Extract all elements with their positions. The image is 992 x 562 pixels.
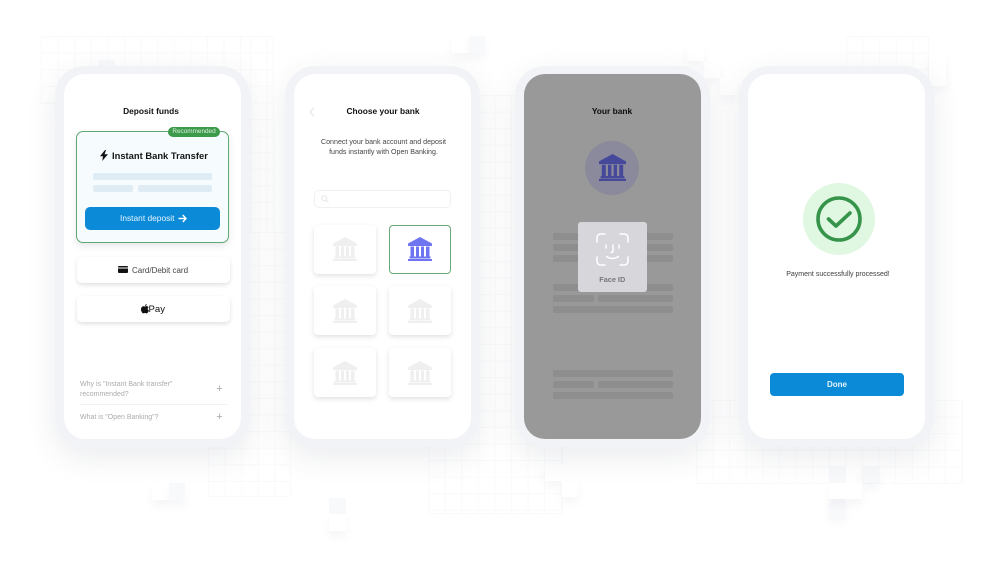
intro text: funds instantly with Open Banking. [329,148,438,156]
floating squares: top right of phone 3 [687,44,737,95]
card heading: Instant Bank Transfer [112,150,208,161]
floating squares: bottom left [165,500,173,502]
option label: Card/Debit card [132,266,188,275]
background grid: centre [428,95,562,514]
icon: bank [408,299,432,323]
panel: phone 2 choose your bank [285,66,480,447]
badge: recommended: Recommended [172,128,216,135]
card: instant bank transfer [76,131,229,243]
faq: why instant bank transfer: recommended? [80,391,129,398]
search field [314,190,451,208]
button label: Instant deposit [120,213,174,223]
faq: why instant bank transfer [80,380,173,398]
apple pay label: Pay [148,304,165,315]
option: apple pay [76,296,230,322]
bank tile 5 [314,348,376,397]
icon: bank [408,361,432,385]
icon: bank in circle [585,141,639,195]
option: card or debit card [76,257,230,283]
faq divider [80,404,228,405]
heading: your bank: Your bank [592,106,632,116]
faq plus icon: + [216,411,223,423]
panel: phone 1 deposit funds [55,66,250,447]
icon: back chevron [310,108,314,116]
icon: bank [333,237,357,261]
floating squares: bottom right [829,499,846,510]
floating squares: bottom centre left [329,498,346,531]
intro text [321,138,446,156]
icon: success check [803,183,875,255]
button: done: Done [827,380,847,389]
heading: deposit funds: Deposit funds [123,106,179,116]
icon: face id [596,233,629,266]
icon: search [321,195,329,203]
faq: what is open banking: What is "Open Banking"? [80,414,159,420]
bank tile 4 [389,286,451,335]
bank tile 1 [314,224,376,274]
background grid: top left [41,36,274,104]
intro text: Connect your bank account and deposit [321,138,446,146]
button: done [770,373,904,396]
bank tile 3 [314,286,376,335]
background grid: between phones 1 and 2 upper [250,36,274,232]
button: instant deposit [85,207,220,230]
dialog: Face ID [578,222,647,292]
success message: Payment successfully processed! [786,270,890,278]
icon: arrow [178,214,187,222]
panel: phone 3 your bank with Face ID [514,66,710,447]
placeholder lines lower [553,370,673,399]
placeholder lines [93,173,212,192]
icon: bank selected [408,237,432,261]
icon: bank [333,361,357,385]
floating squares: top centre [465,53,473,54]
placeholder lines upper [553,233,673,313]
floating squares: behind phone 1 [98,60,115,77]
background grid: bottom right [696,400,962,484]
bank tile 6 [389,348,451,397]
floating squares: bottom centre [545,464,578,497]
Face ID label: Face ID [599,274,625,284]
icon: bank [333,299,357,323]
faq: why instant bank transfer: Why is "Instant Bank transfer" [80,381,173,388]
badge: recommended [168,127,220,137]
floating squares: right of phone 4 [929,52,946,86]
icon: apple [141,304,149,314]
background grid: between phones 1 and 2 lower [208,232,291,497]
bank tile 2 selected [389,224,451,274]
panel: phone 4 payment success [739,66,934,447]
heading: choose your bank: Choose your bank [346,106,420,116]
background grid: top right [846,36,928,86]
icon: card [118,266,128,273]
icon: lightning bolt [100,150,108,161]
faq plus icon: + [216,383,223,395]
icon: bank dark [599,154,626,181]
